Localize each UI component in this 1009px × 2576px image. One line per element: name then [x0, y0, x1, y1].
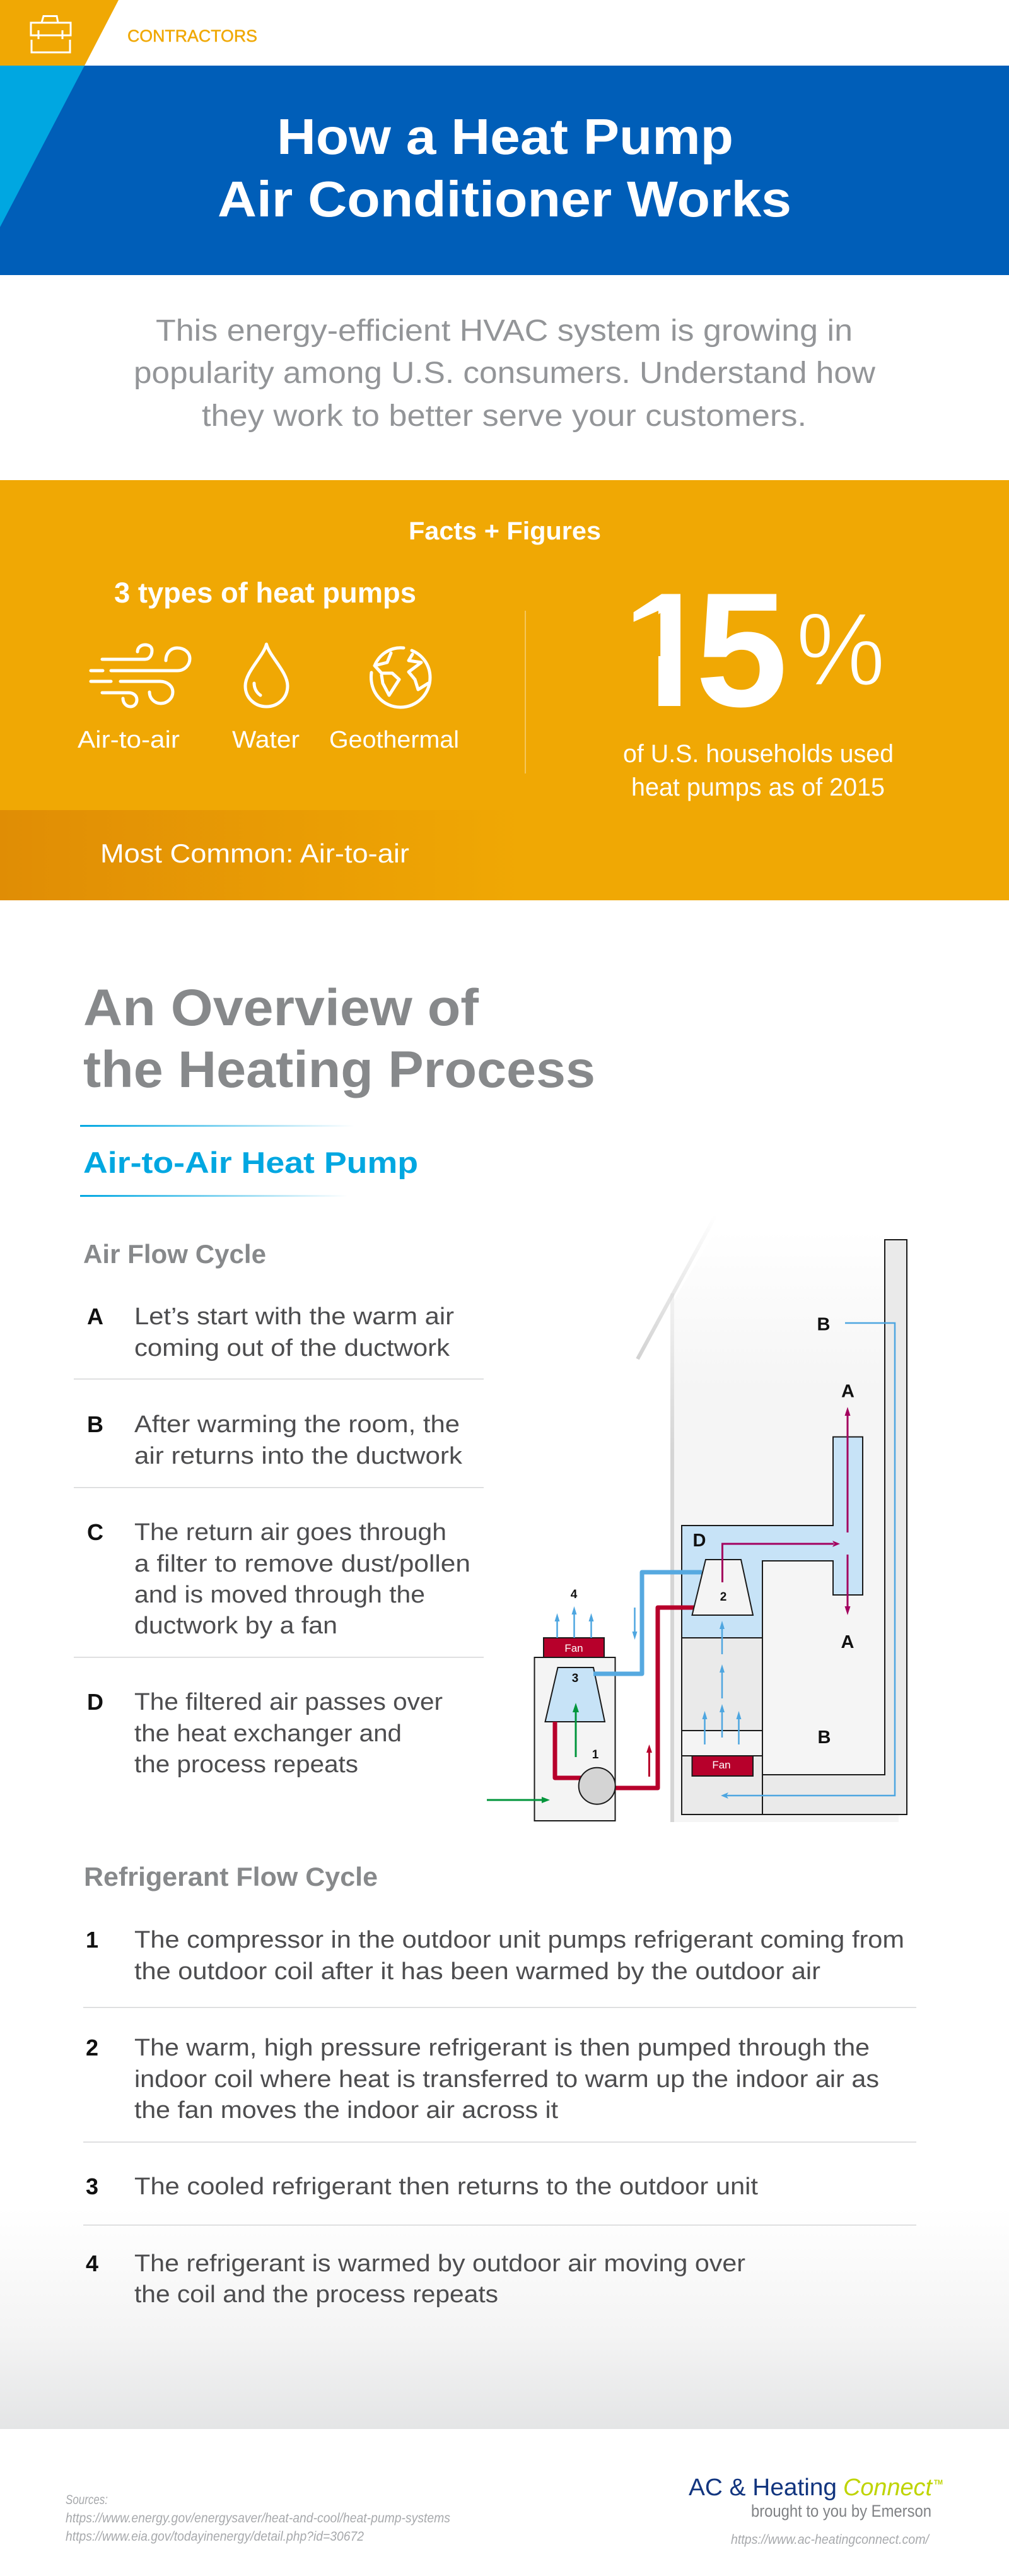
- arrows: purple supply air: [723, 1407, 850, 1615]
- step 2: indoor coil where heat is transferred to warm up the indoor air as: [134, 2066, 879, 2093]
- icon: briefcase: [31, 16, 71, 52]
- type labels: Geothermal: [329, 727, 459, 753]
- stat: 15 percent: %: [796, 591, 885, 707]
- heading: overview: the Heating Process: [83, 1041, 595, 1098]
- step 3: The cooled refrigerant then returns to the outdoor unit: [134, 2173, 758, 2200]
- indoor coil: [692, 1560, 753, 1615]
- diagram labels: A: [841, 1382, 854, 1402]
- step 1: The compressor in the outdoor unit pumps refrigerant coming from: [134, 1927, 904, 1953]
- pipe: cool refrigerant: [593, 1572, 702, 1674]
- intro text: they work to better serve your customers.: [202, 399, 807, 433]
- logo: AC & Heating Connect: [689, 2474, 943, 2520]
- arrows: green outdoor air: [487, 1703, 579, 1803]
- step B: [87, 1411, 463, 1469]
- panel: facts and figures: [0, 480, 1009, 900]
- step A: A: [87, 1303, 103, 1329]
- indoor fan: Fan: [712, 1759, 731, 1771]
- diagram labels: D: [693, 1531, 706, 1551]
- step A: Let’s start with the warm air: [134, 1303, 454, 1330]
- heading: air flow cycle: Air Flow Cycle: [83, 1239, 266, 1269]
- house outline: [638, 1215, 899, 1822]
- step 4: the coil and the process repeats: [134, 2281, 498, 2308]
- step 3: 3: [86, 2173, 98, 2199]
- stat caption: [623, 740, 894, 801]
- diagram labels: 1: [592, 1748, 599, 1761]
- arrows: blue air: [555, 1323, 895, 1799]
- title: Air Conditioner Works: [218, 171, 791, 227]
- type labels: Water: [232, 727, 300, 753]
- step 2: [86, 2035, 879, 2124]
- step D: the process repeats: [134, 1751, 358, 1778]
- step D: The filtered air passes over: [134, 1689, 443, 1715]
- accent: cyan wedge: [0, 66, 85, 227]
- diagram labels: 2: [720, 1591, 726, 1604]
- icon: water drop: [245, 644, 288, 707]
- sources: [66, 2493, 450, 2544]
- sources: Sources:: [66, 2493, 108, 2507]
- diagram labels: 3: [572, 1672, 578, 1685]
- heading: facts + figures: Facts + Figures: [409, 517, 601, 545]
- step C: [87, 1519, 470, 1639]
- step B: air returns into the ductwork: [134, 1443, 463, 1469]
- logo: AC & Heating Connect: TM: [934, 2479, 943, 2486]
- stat: 15 percent: [633, 594, 881, 708]
- list: refrigerant flow cycle: [83, 1927, 916, 2308]
- title: [218, 109, 791, 227]
- step C: ductwork by a fan: [134, 1613, 337, 1639]
- background: footer fade: [0, 2208, 1009, 2429]
- step 1: the outdoor coil after it has been warmed by the outdoor air: [134, 1958, 820, 1985]
- most common band text: Most Common: Air-to-air: [100, 838, 409, 868]
- heading: refrigerant flow cycle: Refrigerant Flow Cycle: [84, 1862, 378, 1891]
- outdoor fan: [544, 1638, 604, 1657]
- sources: https://www.energy.gov/energysaver/heat-and-cool/heat-pump-systems: [66, 2511, 450, 2526]
- outdoor unit: [535, 1638, 615, 1821]
- step 2: 2: [86, 2035, 98, 2061]
- outdoor coil: [545, 1667, 605, 1722]
- list: air flow cycle: [74, 1303, 484, 1778]
- step B: After warming the room, the: [134, 1411, 460, 1438]
- stat: 15 percent: 5: [696, 558, 788, 741]
- intro text: [134, 314, 875, 433]
- diagram: heat pump system: [487, 1215, 907, 1822]
- step C: and is moved through the: [134, 1582, 425, 1608]
- intro text: popularity among U.S. consumers. Understand how: [134, 356, 875, 390]
- logo: AC & Heating Connect: brought to you by Emerson: [751, 2502, 931, 2520]
- heading: overview: [83, 979, 595, 1098]
- step D: the heat exchanger and: [134, 1720, 402, 1747]
- pipe: warm refrigerant: [555, 1608, 695, 1788]
- header band: [0, 66, 1009, 275]
- step 4: The refrigerant is warmed by outdoor air moving over: [134, 2250, 745, 2277]
- type labels: Air-to-air: [78, 727, 180, 753]
- tab label: CONTRACTORS: [127, 26, 257, 45]
- step 4: [86, 2250, 745, 2308]
- stat: 15 percent: 1: [622, 558, 713, 741]
- icon: globe: [371, 648, 430, 707]
- step 4: 4: [86, 2250, 98, 2276]
- step 1: 1: [86, 1927, 98, 1953]
- step D: [87, 1689, 443, 1778]
- diagram labels: [571, 1315, 854, 1761]
- intro text: This energy-efficient HVAC system is growing in: [156, 314, 853, 348]
- compressor: [579, 1768, 615, 1804]
- icon: wind: [91, 645, 190, 707]
- diagram labels: B: [817, 1315, 830, 1335]
- heading: overview: An Overview of: [83, 979, 479, 1037]
- step 2: The warm, high pressure refrigerant is then pumped through the: [134, 2035, 870, 2061]
- step A: coming out of the ductwork: [134, 1335, 450, 1362]
- logo: AC & Heating Connect: Connect: [843, 2474, 933, 2501]
- step D: D: [87, 1689, 103, 1715]
- step C: C: [87, 1519, 103, 1545]
- stat caption: heat pumps as of 2015: [631, 773, 885, 801]
- website url: https://www.ac-heatingconnect.com/: [731, 2532, 930, 2547]
- sources: https://www.eia.gov/todayinenergy/detail.php?id=30672: [66, 2529, 364, 2544]
- diagram labels: 4: [571, 1588, 578, 1601]
- type labels: [78, 727, 459, 753]
- subheading: air-to-air heat pump: Air-to-Air Heat Pump: [83, 1146, 418, 1179]
- ductwork: return duct: [682, 1240, 907, 1814]
- step 1: [86, 1927, 904, 1985]
- outdoor fan: Fan: [564, 1642, 583, 1654]
- heading: 3 types: 3 types of heat pumps: [114, 577, 416, 609]
- indoor fan: [692, 1756, 753, 1776]
- step 2: the fan moves the indoor air across it: [134, 2097, 558, 2124]
- step A: [87, 1303, 454, 1362]
- title: How a Heat Pump: [277, 109, 733, 165]
- diagram labels: B: [818, 1727, 831, 1748]
- step B: B: [87, 1411, 103, 1437]
- step C: The return air goes through: [134, 1519, 446, 1546]
- diagram labels: A: [841, 1632, 854, 1652]
- contractors tab: [0, 0, 119, 66]
- logo: AC & Heating Connect: AC & Heating: [689, 2474, 837, 2501]
- ductwork: supply duct: [682, 1437, 863, 1638]
- step C: a filter to remove dust/pollen: [134, 1551, 470, 1577]
- arrow: red refrigerant: [646, 1744, 652, 1777]
- stat caption: of U.S. households used: [623, 740, 894, 768]
